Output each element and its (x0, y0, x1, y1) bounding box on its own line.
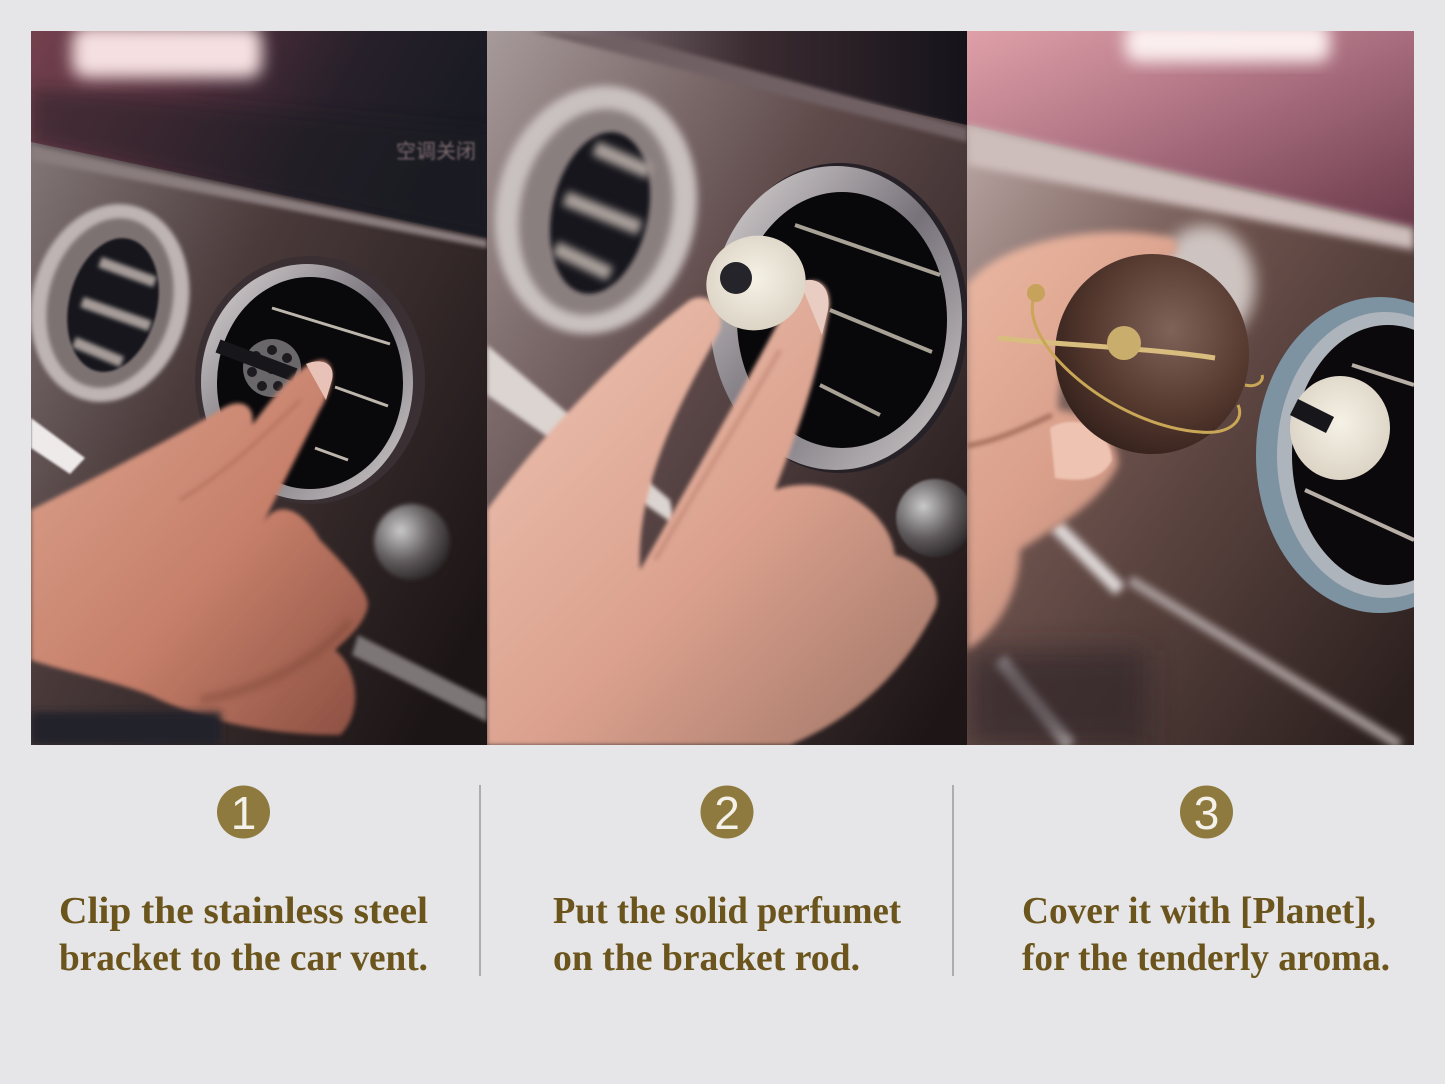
panel: step 3 photo (967, 22, 1445, 745)
icon: hand holding perfume (487, 280, 937, 745)
icon: front air vent (1256, 297, 1414, 613)
text: step 2 instruction: Put the solid perfumet (553, 890, 901, 932)
icon: dashboard knob (896, 479, 974, 557)
icon: stainless steel bracket (218, 339, 301, 397)
icon: rear air vent (31, 202, 192, 405)
text: step 2 instruction: on the bracket rod. (553, 937, 860, 979)
badge: step 2: 2 (714, 787, 740, 839)
badge: step 3: 3 (1194, 787, 1219, 839)
text: step 3 instruction: Cover it with [Planet], (1022, 890, 1376, 932)
caption: dashboard label: 空调关闭 (396, 135, 476, 164)
icon: dashboard knob (374, 504, 450, 580)
text: step 3 instruction: for the tenderly aroma. (1022, 937, 1390, 979)
badge: step 3 (1180, 786, 1233, 839)
icon: solid perfume on rod (1290, 376, 1390, 480)
icon: hand holding planet (967, 232, 1178, 650)
icon: front air vent (710, 163, 968, 473)
panel: step 2 photo (472, 31, 974, 745)
badge: step 1: 1 (231, 787, 256, 839)
divider (952, 785, 954, 976)
text: step 3 instruction (1022, 890, 1390, 979)
badge: step 2 (700, 786, 754, 839)
text: step 2 instruction (553, 890, 901, 979)
icon: front air vent (195, 256, 425, 504)
icon: wooden planet diffuser (998, 254, 1262, 454)
icon: rear air vent (490, 82, 702, 339)
icon: hand holding bracket (31, 360, 368, 735)
text: step 1 instruction: Clip the stainless steel (59, 890, 428, 932)
panel: step 1 photo (10, 26, 487, 745)
text: step 1 instruction (59, 890, 428, 979)
icon: solid perfume disc (706, 236, 806, 330)
text: step 1 instruction: bracket to the car vent. (59, 937, 428, 979)
divider (479, 785, 481, 976)
badge: step 1 (217, 786, 270, 839)
